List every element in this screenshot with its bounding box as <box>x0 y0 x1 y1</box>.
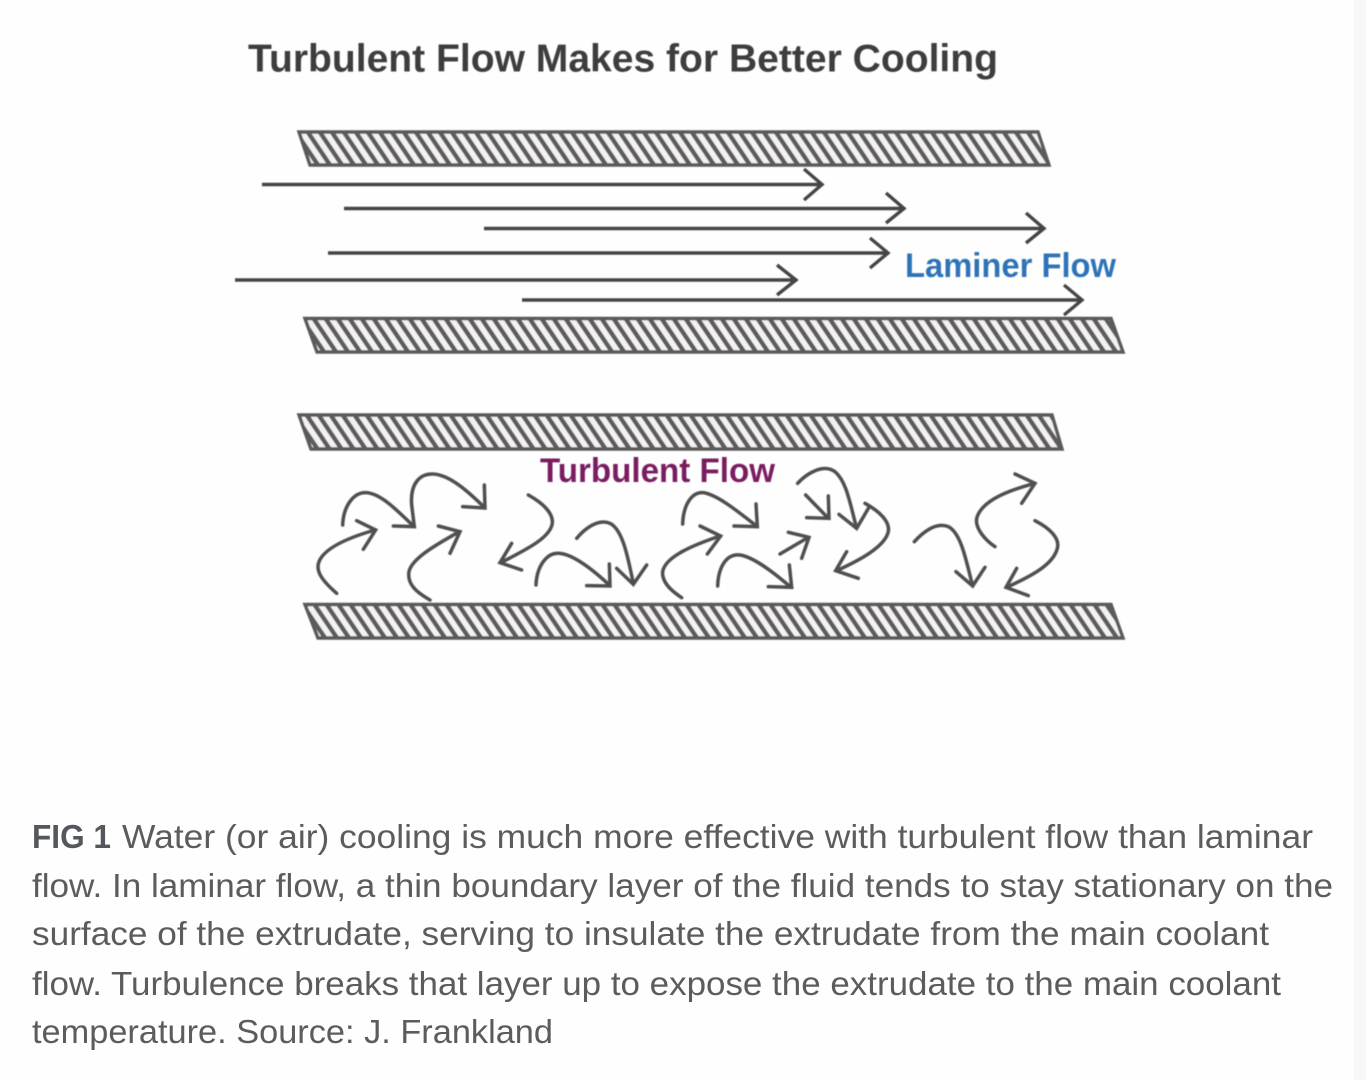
caption text: temperature. Source: J. Frankland <box>32 1014 553 1051</box>
caption text: Water (or air) cooling is much more effective with turbulent flow than laminar <box>122 819 1313 856</box>
turbulent arrows, left group <box>318 474 647 600</box>
top wall of turbulent channel <box>299 415 1062 449</box>
caption text <box>32 819 1333 1051</box>
panel: laminar flow diagram <box>235 132 1123 352</box>
caption text: surface of the extrudate, serving to insulate the extrudate from the main coolant <box>32 916 1270 953</box>
top wall of laminar channel <box>299 132 1049 165</box>
label: Laminer Flow: Laminer Flow <box>905 247 1117 285</box>
title: Turbulent Flow Makes for Better Cooling <box>248 38 998 80</box>
bottom wall of turbulent channel <box>305 604 1123 638</box>
laminar flow arrows <box>235 169 1082 315</box>
turbulent arrows, right group <box>663 469 1058 598</box>
caption text: FIG 1 <box>32 819 111 856</box>
caption text: flow. Turbulence breaks that layer up to expose the extrudate to the main coolant <box>32 966 1282 1003</box>
bottom wall of laminar channel <box>305 318 1123 352</box>
panel: turbulent flow diagram <box>299 415 1123 638</box>
caption text: flow. In laminar flow, a thin boundary layer of the fluid tends to stay stationary on the <box>32 868 1333 905</box>
label: Turbulent Flow: Turbulent Flow <box>540 452 776 490</box>
